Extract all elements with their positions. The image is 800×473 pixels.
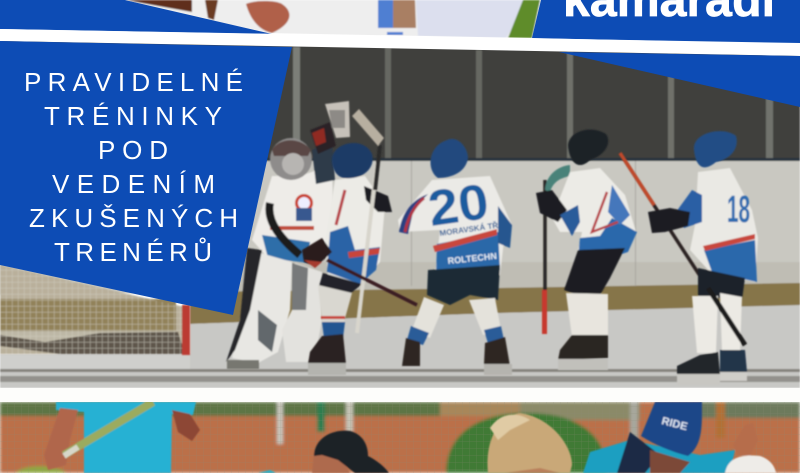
player: number 20: ROLTECHN xyxy=(447,251,497,266)
left leg pad xyxy=(232,250,292,363)
white diagonal band xyxy=(0,29,800,56)
blond child xyxy=(487,413,572,473)
player: number 20 xyxy=(398,139,512,375)
player: number 20: 20 xyxy=(425,173,492,237)
top-left blue corner shape xyxy=(0,0,272,34)
panel heading text: PRAVIDELNÉ xyxy=(24,67,243,97)
player: number 18 xyxy=(620,131,758,385)
player: number 16 xyxy=(302,109,417,375)
goal net xyxy=(0,265,190,355)
hockey photo xyxy=(0,40,800,388)
panel heading text: VEDENÍM xyxy=(52,169,215,199)
player with navy cap xyxy=(583,402,776,473)
fence mesh xyxy=(0,402,800,473)
player with navy cap: RIDE xyxy=(660,415,689,433)
top-right blue banner xyxy=(532,0,800,44)
rink background xyxy=(0,40,800,388)
blue text panel xyxy=(0,41,292,315)
court background xyxy=(0,402,800,473)
player with black cap xyxy=(258,431,389,473)
right blue wedge xyxy=(559,52,800,107)
panel heading text: POD xyxy=(98,135,168,165)
panel heading text xyxy=(24,67,243,267)
panel heading text: ZKUŠENÝCH xyxy=(29,203,238,233)
tennis photo xyxy=(0,402,800,473)
right leg pad xyxy=(282,263,322,362)
player in teal shirt with racket xyxy=(44,402,200,473)
player: black helmet xyxy=(536,130,637,370)
player: number 20: MORAVSKÁ TŘEB xyxy=(439,219,510,238)
top photo strip xyxy=(120,0,550,38)
white separator xyxy=(0,388,800,402)
player: goalie xyxy=(226,101,350,369)
panel heading text: TRÉNINKY xyxy=(44,101,222,131)
panel heading text: TRENÉRŮ xyxy=(54,236,212,267)
player: number 18: 18 xyxy=(727,189,750,231)
